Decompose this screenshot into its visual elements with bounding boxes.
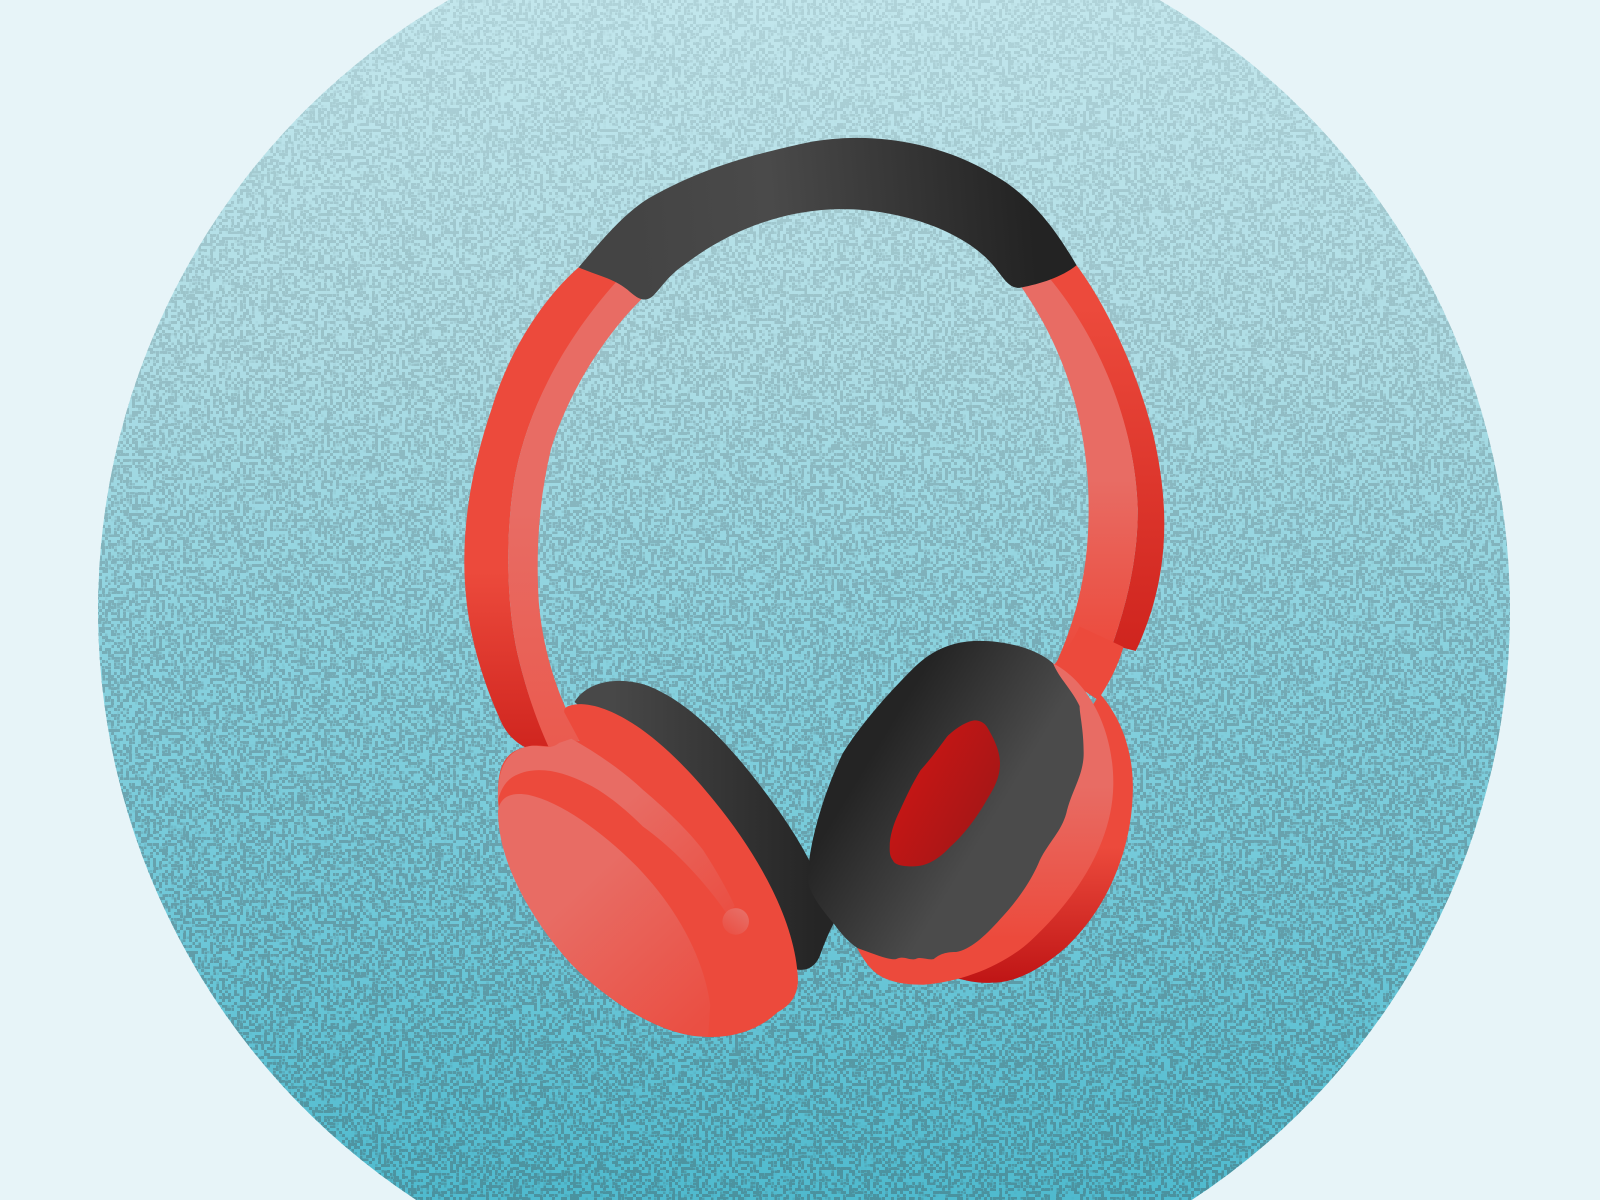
left arm of headband bbox=[464, 267, 645, 753]
right arm of headband bbox=[1020, 265, 1164, 700]
left housing bbox=[498, 704, 798, 1037]
right cushion bbox=[808, 641, 1084, 959]
left housing ridge bbox=[498, 739, 735, 913]
left ear cup bbox=[498, 704, 798, 1037]
right arm connector bbox=[1051, 627, 1123, 700]
right plate bbox=[857, 663, 1113, 985]
right ear cup bbox=[808, 641, 1133, 985]
right inner speaker bbox=[890, 720, 1000, 866]
left outer face bbox=[498, 794, 710, 1037]
black headband padding bbox=[579, 138, 1077, 300]
right outer shell bbox=[954, 694, 1133, 983]
left button bbox=[722, 908, 749, 935]
left ear cushion bbox=[574, 681, 834, 970]
headphones bbox=[464, 138, 1164, 1037]
